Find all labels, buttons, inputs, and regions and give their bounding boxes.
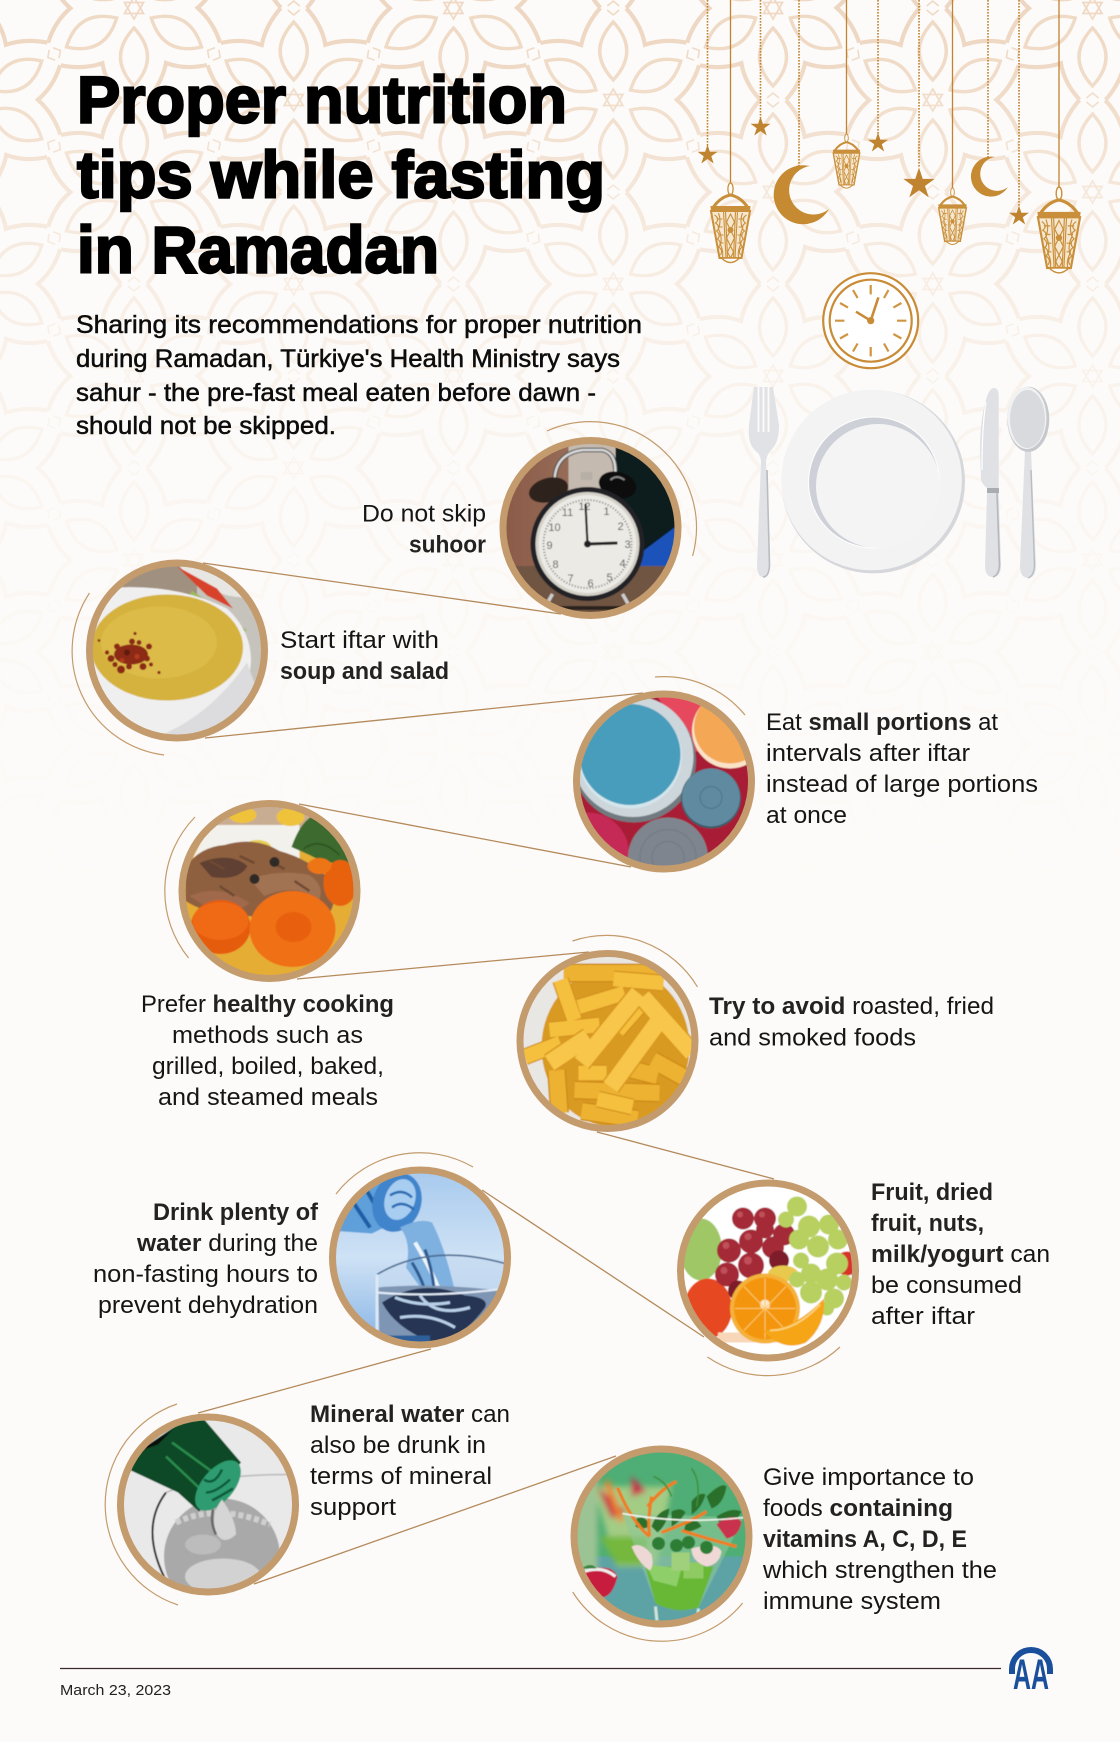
hanging Ramadan decorations <box>698 0 1081 273</box>
image ring <box>332 1170 508 1345</box>
photo: french fries <box>524 957 692 1125</box>
label: methods such as <box>172 1022 363 1049</box>
image ring <box>90 563 264 738</box>
image ring <box>120 1417 296 1592</box>
panel: mineral water <box>105 1401 510 1614</box>
label: instead of large portions <box>766 771 1038 798</box>
label: after iftar <box>871 1303 975 1330</box>
intro text block <box>76 311 642 440</box>
label <box>93 1199 319 1319</box>
photo: alarm clock: 8 <box>552 559 559 571</box>
decorative arc <box>573 1592 743 1641</box>
image ring <box>520 954 695 1128</box>
label: which strengthen the <box>762 1557 997 1584</box>
decorative arc <box>547 422 696 556</box>
icon: plate and cutlery <box>749 386 1049 578</box>
label: Give importance to <box>763 1464 974 1491</box>
intro text block: should not be skipped. <box>76 412 336 440</box>
label: grilled, boiled, baked, <box>152 1053 384 1080</box>
icon: wall clock <box>823 273 918 368</box>
intro text block: during Ramadan, Türkiye's Health Ministry says <box>76 345 620 373</box>
icon: Anadolu Agency logo <box>1012 1650 1050 1699</box>
photo: mineral water bottle <box>124 1420 292 1588</box>
decorative arc <box>572 935 698 987</box>
knife <box>980 388 1001 577</box>
photo: soup bowl <box>93 566 261 734</box>
photo: alarm clock: 2 <box>617 521 624 533</box>
intro text block: Sharing its recommendations for proper nutrition <box>76 311 642 339</box>
photo: alarm clock <box>506 444 674 612</box>
date: March 23, 2023 <box>60 1683 171 1699</box>
label: and smoked foods <box>709 1024 916 1052</box>
panel: drink water <box>93 1153 510 1348</box>
title: in Ramadan <box>77 212 439 286</box>
panel: vitamins <box>572 1446 997 1641</box>
label: Try to avoid roasted, fried <box>709 993 994 1020</box>
label: Eat small portions at <box>766 709 998 736</box>
label <box>762 1464 997 1615</box>
label: Do not skip <box>362 500 486 528</box>
label: intervals after iftar <box>766 740 970 767</box>
connector lines between circles <box>198 563 774 1584</box>
decorative arc <box>165 817 195 958</box>
label: terms of mineral <box>310 1463 492 1490</box>
spoon <box>1007 387 1049 578</box>
label: non-fasting hours to <box>93 1261 318 1288</box>
label: milk/yogurt can <box>871 1241 1050 1268</box>
label: Prefer healthy cooking <box>141 991 394 1018</box>
label: suhoor <box>409 532 486 558</box>
image ring <box>503 440 678 616</box>
panel: soup and salad <box>72 538 449 755</box>
photo: alarm clock: 11 <box>562 507 573 519</box>
image ring <box>182 804 357 978</box>
label: foods containing <box>763 1495 953 1522</box>
fork <box>749 386 779 577</box>
image ring <box>680 1183 856 1358</box>
photo: alarm clock: 6 <box>587 578 594 590</box>
label: Fruit, dried <box>871 1179 993 1206</box>
label <box>362 500 486 558</box>
decorative arc <box>708 1347 840 1376</box>
decorative arc <box>336 1153 473 1194</box>
photo: alarm clock: 5 <box>606 572 613 584</box>
photo: alarm clock: 10 <box>548 522 561 534</box>
panel: fruit and nuts <box>678 1179 1050 1376</box>
label: at once <box>766 802 847 829</box>
photo: alarm clock: 4 <box>619 558 626 570</box>
label: Start iftar with <box>280 627 439 654</box>
decorative arc <box>72 593 164 755</box>
label: vitamins A, C, D, E <box>763 1526 967 1553</box>
photo: alarm clock: 9 <box>546 540 553 552</box>
photo: alarm clock: 7 <box>567 573 574 585</box>
panel: avoid fried foods <box>518 935 994 1131</box>
photo: water pouring <box>336 1174 504 1342</box>
label <box>280 627 449 685</box>
intro text block: sahur - the pre-fast meal eaten before dawn - <box>76 379 596 407</box>
label <box>766 709 1038 829</box>
label: and steamed meals <box>158 1084 378 1111</box>
photo: alarm clock: 1 <box>603 506 610 518</box>
panel: healthy cooking <box>141 801 394 1111</box>
title: tips while fasting <box>77 138 605 212</box>
label: soup and salad <box>280 658 449 685</box>
photo: salad in glass <box>578 1452 746 1620</box>
photo: alarm clock: 12 <box>578 501 591 513</box>
label: support <box>310 1494 396 1521</box>
label <box>310 1401 510 1521</box>
label: immune system <box>763 1588 941 1615</box>
icon: Anadolu Agency logo: AA <box>1013 1651 1049 1699</box>
label: be consumed <box>871 1272 1022 1299</box>
title: Proper nutrition <box>77 62 567 136</box>
panel: do not skip suhoor <box>362 422 696 626</box>
image ring <box>576 694 752 869</box>
label: fruit, nuts, <box>871 1210 984 1237</box>
photo: stew with carrots <box>186 807 354 975</box>
photo: alarm clock: 3 <box>624 539 631 551</box>
title <box>77 62 605 286</box>
label <box>141 991 394 1111</box>
footer rule <box>60 1668 1001 1670</box>
panel: small portions <box>573 676 1038 872</box>
label: Mineral water can <box>310 1401 510 1428</box>
label: prevent dehydration <box>98 1292 318 1319</box>
decorative arc <box>105 1404 178 1605</box>
photo: fruit <box>684 1196 852 1346</box>
decorative arc <box>655 677 745 715</box>
image ring <box>574 1449 749 1624</box>
photo: plates <box>580 698 748 866</box>
label <box>871 1179 1050 1330</box>
label: also be drunk in <box>310 1432 486 1459</box>
label: Drink plenty of <box>153 1199 319 1226</box>
label <box>709 993 994 1052</box>
plate <box>781 390 965 573</box>
label: water during the <box>136 1230 318 1257</box>
